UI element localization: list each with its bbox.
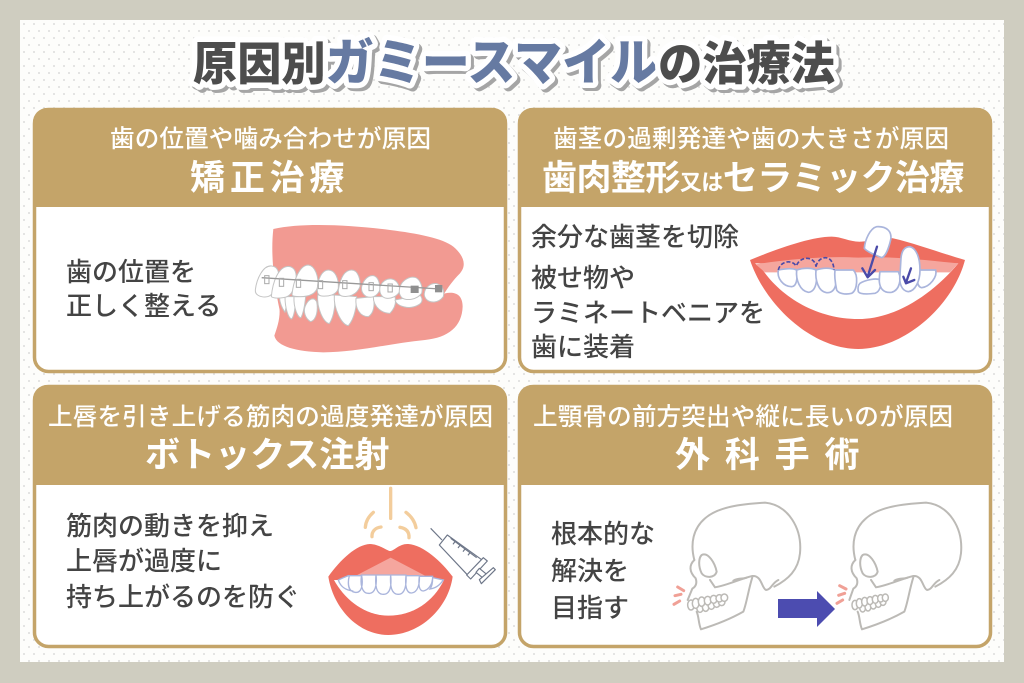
description: 上唇が過度に	[66, 546, 222, 576]
cause text: 上顎骨の前方突出や縦に長いのが原因	[533, 403, 953, 431]
panel: orthodontics	[33, 108, 507, 372]
description: 余分な歯茎を切除	[531, 222, 739, 252]
panel: surgery	[518, 385, 992, 646]
description: 筋肉の動きを抑え	[66, 511, 274, 541]
cause text: 歯の位置や噛み合わせが原因	[110, 125, 431, 153]
description: 正しく整える	[66, 291, 221, 321]
heading: 矯正治療	[190, 159, 345, 198]
description: 被せ物や	[531, 263, 635, 293]
heading: 外科手術	[675, 436, 860, 475]
description: 歯に装着	[531, 332, 635, 362]
description: 持ち上がるのを防ぐ	[66, 582, 300, 612]
description: 解決を	[551, 556, 629, 586]
description: 目指す	[551, 593, 629, 623]
illustration: skull after	[837, 503, 961, 629]
cause text: 上唇を引き上げる筋肉の過度発達が原因	[48, 403, 493, 431]
heading: ボトックス注射	[145, 436, 390, 475]
title: 原因別ガミースマイルの治療法	[193, 35, 835, 91]
description: 根本的な	[551, 519, 655, 549]
heading: 歯肉整形又はセラミック治療	[542, 159, 965, 198]
panel: gum and ceramic	[518, 108, 992, 372]
illustration: smile with veneers	[750, 227, 965, 349]
illustration: skull before	[674, 503, 800, 629]
illustration: lips, nose and syringe	[328, 488, 495, 635]
description: ラミネートベニアを	[531, 298, 765, 328]
arrow	[778, 591, 835, 627]
illustration: teeth with braces	[255, 225, 464, 352]
panel: botox	[33, 385, 507, 646]
description: 歯の位置を	[66, 257, 196, 287]
cause text: 歯茎の過剰発達や歯の大きさが原因	[553, 125, 949, 153]
